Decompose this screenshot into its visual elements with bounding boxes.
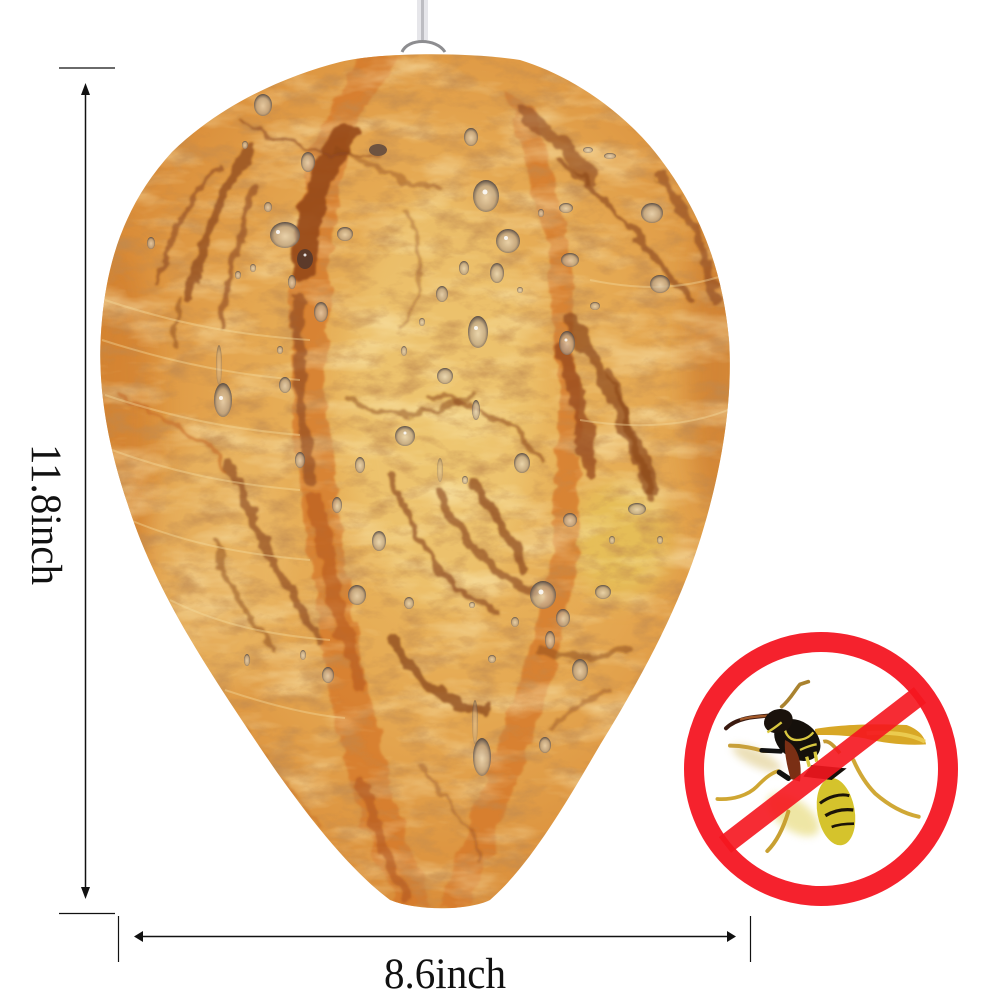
orange panel seams: [292, 55, 580, 908]
red circle and slash: [694, 642, 948, 896]
height dimension: 11.8 inch: [22, 68, 115, 914]
brown streaks: [120, 110, 718, 895]
no-wasps prohibition sign: [694, 642, 948, 896]
brown bark texture: [90, 40, 740, 920]
wasp nest decoy: [86, 40, 743, 920]
water droplets: [147, 94, 670, 776]
droplet highlights: [219, 190, 568, 594]
icon: wasp: [717, 682, 926, 851]
width dimension: 8.6 inch: [118, 916, 750, 990]
hanging string and ring: [402, 0, 445, 52]
pleat highlights: [102, 275, 728, 718]
height label: 11.8inch: [22, 444, 69, 585]
light yellow mottling: [90, 40, 740, 920]
hive shading: [86, 190, 743, 690]
